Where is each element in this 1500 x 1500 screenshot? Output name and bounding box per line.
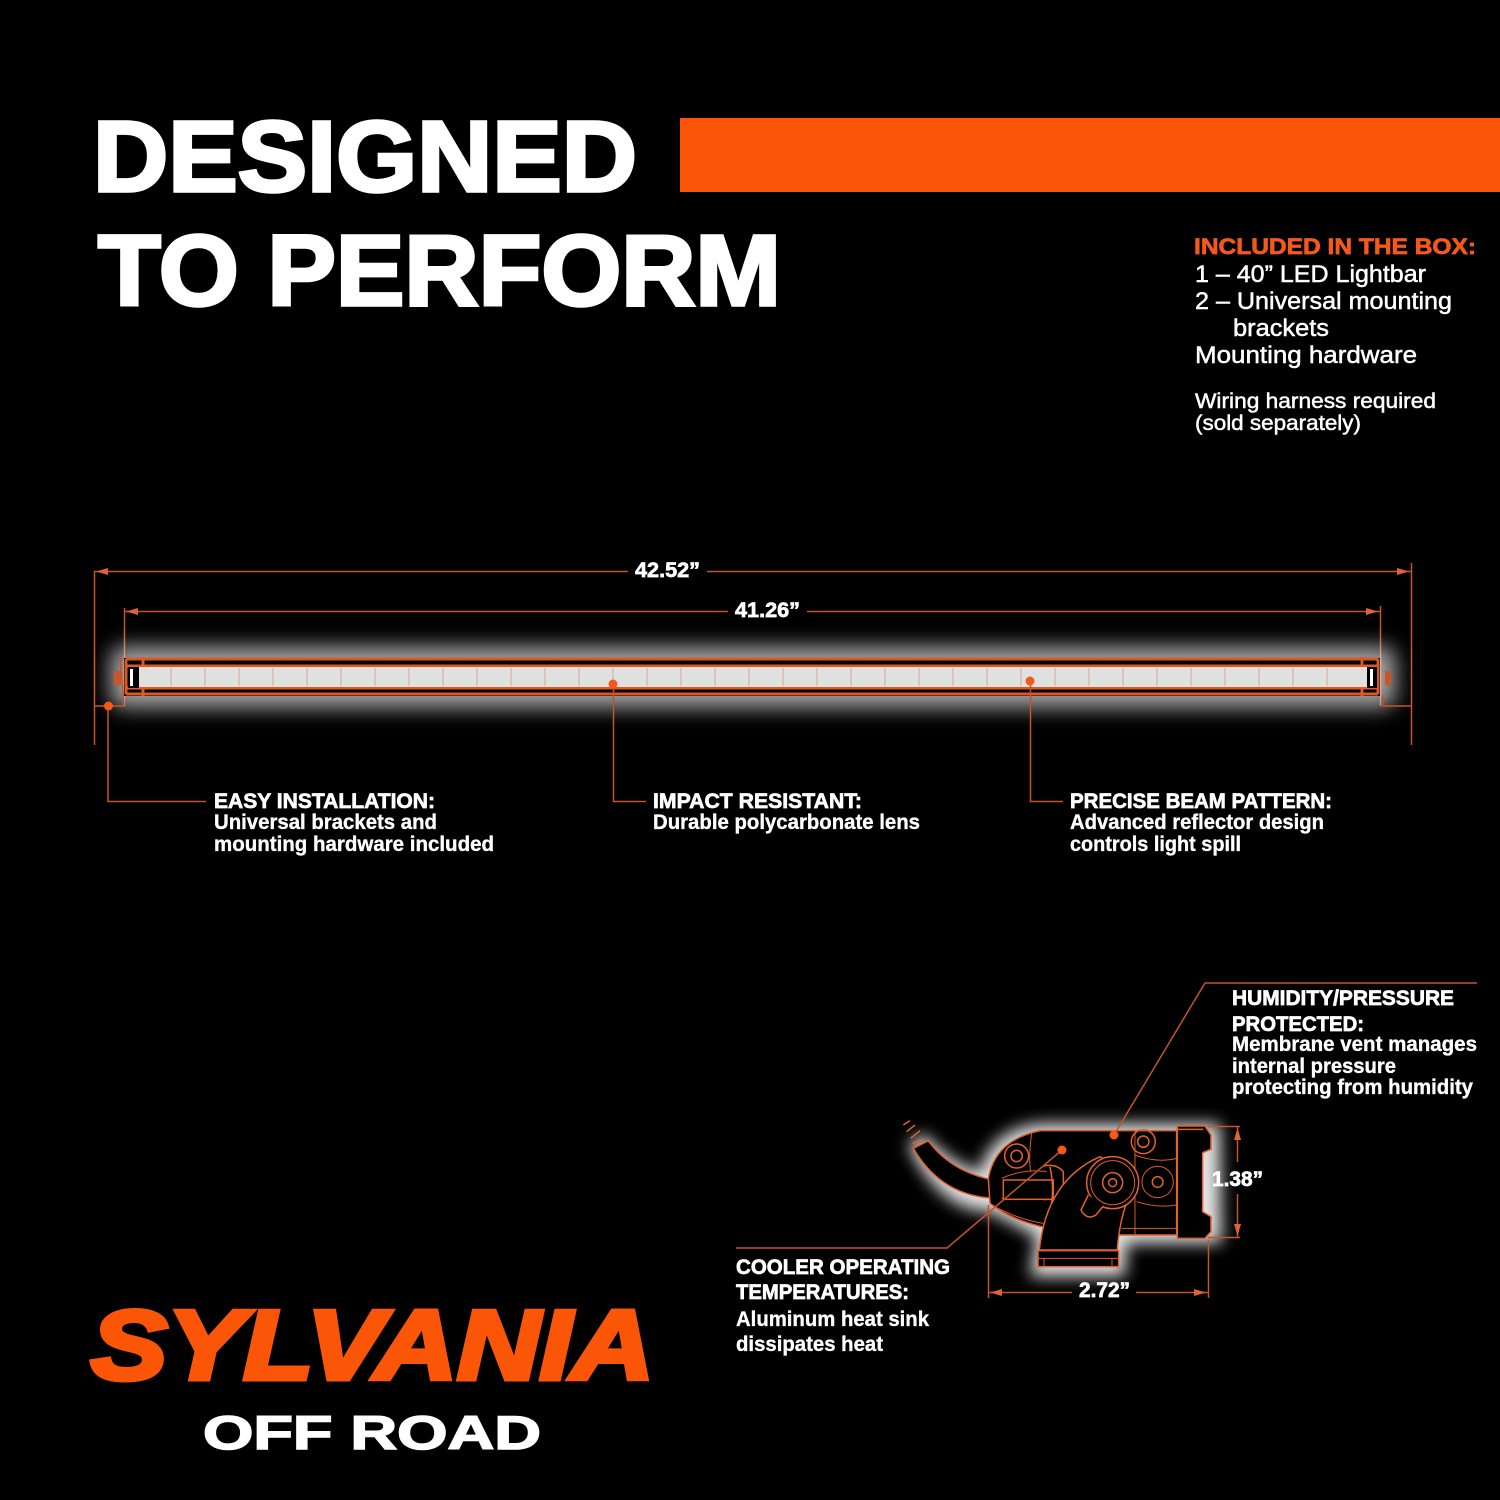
logo: Sylvania Off Road: SYLVANIA xyxy=(91,1290,654,1400)
callout: impact resistant: IMPACT RESISTANT: xyxy=(653,790,862,813)
callout: cooler operating temperatures: Aluminum heat sink xyxy=(736,1308,929,1331)
included in the box: 2 – Universal mounting xyxy=(1195,288,1452,315)
included in the box: INCLUDED IN THE BOX: xyxy=(1194,234,1476,259)
wire xyxy=(913,1141,1003,1198)
end cap xyxy=(1177,1126,1211,1238)
side view dimensions xyxy=(988,1126,1263,1302)
light bar front view xyxy=(94,646,1411,708)
included in the box: Wiring harness required xyxy=(1195,390,1436,413)
callout: humidity/pressure protected: PROTECTED: xyxy=(1232,1013,1364,1036)
callout: cooler operating temperatures xyxy=(736,1146,1066,1356)
callout: easy installation: EASY INSTALLATION: xyxy=(214,790,435,813)
included in the box: (sold separately) xyxy=(1195,412,1361,435)
callout: precise beam pattern: PRECISE BEAM PATTERN: xyxy=(1070,790,1332,813)
included in the box: brackets xyxy=(1233,315,1329,342)
callout: humidity/pressure protected xyxy=(1110,983,1477,1140)
callout: cooler operating temperatures: dissipates heat xyxy=(736,1333,883,1356)
callout: cooler operating temperatures: COOLER OPERATING xyxy=(736,1256,950,1279)
callout: humidity/pressure protected: protecting from humidity xyxy=(1232,1076,1473,1099)
logo: Sylvania Off Road: OFF ROAD xyxy=(203,1406,541,1459)
lens segment dividers xyxy=(171,668,1327,686)
included in the box: 1 – 40” LED Lightbar xyxy=(1195,261,1426,288)
width dimensions: 41.26” xyxy=(735,599,800,622)
callout: humidity/pressure protected: HUMIDITY/PRESSURE xyxy=(1232,987,1454,1010)
callout: precise beam pattern xyxy=(1026,676,1332,856)
callout: easy installation xyxy=(104,702,494,856)
title: DESIGNED xyxy=(93,101,637,213)
screws xyxy=(1131,1130,1155,1154)
callout: precise beam pattern: controls light spill xyxy=(1070,833,1241,856)
mount arm xyxy=(1039,1157,1137,1250)
title: TO PERFORM xyxy=(98,215,781,327)
width dimensions xyxy=(94,559,1412,745)
callout: impact resistant: Durable polycarbonate lens xyxy=(653,811,920,834)
callout: impact resistant xyxy=(608,680,920,834)
logo: Sylvania Off Road xyxy=(91,1290,654,1459)
included in the box xyxy=(1194,234,1476,435)
callout: easy installation: Universal brackets and xyxy=(214,811,437,834)
side view with bracket xyxy=(903,1121,1222,1277)
callout: humidity/pressure protected: Membrane vent manages xyxy=(1232,1033,1477,1056)
body xyxy=(988,1131,1177,1235)
callout: easy installation: mounting hardware included xyxy=(214,833,494,856)
callout: humidity/pressure protected: internal pressure xyxy=(1232,1055,1396,1078)
glow xyxy=(908,1123,1222,1277)
callout: cooler operating temperatures: TEMPERATURES: xyxy=(736,1281,909,1304)
orange title bar xyxy=(680,118,1500,192)
title xyxy=(93,101,781,327)
width dimensions: 42.52” xyxy=(635,559,700,582)
included in the box: Mounting hardware xyxy=(1195,342,1417,369)
side view dimensions: 1.38” xyxy=(1212,1168,1263,1191)
side view dimensions: 2.72” xyxy=(1079,1279,1130,1302)
callout: precise beam pattern: Advanced reflector design xyxy=(1070,811,1324,834)
